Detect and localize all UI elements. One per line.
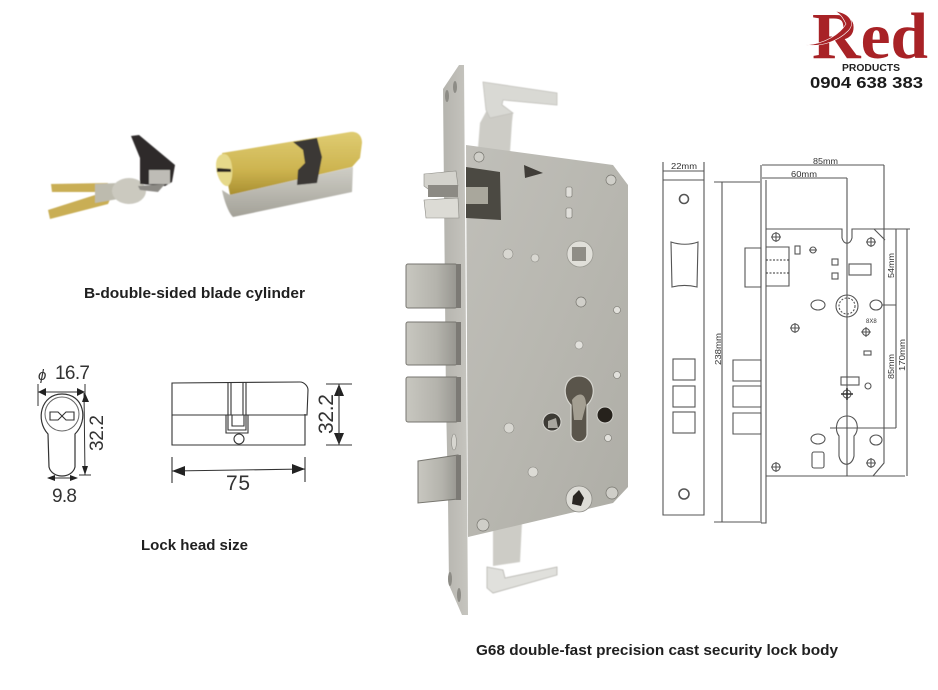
dimension: 54mm: 54mm [886, 253, 896, 278]
diagram: cylinder front view [38, 363, 108, 507]
photo: key set [48, 135, 175, 219]
dimension: 32.2 vertical: 32.2 [87, 415, 108, 451]
faceplate [443, 65, 468, 615]
dimension: 85mm top: 85mm [813, 156, 838, 166]
logo subtitle: PRODUCTS [842, 63, 900, 74]
bottom hook latch [487, 522, 557, 593]
dimension: 16.7: 16.7 [55, 363, 90, 384]
photo: brass cylinder [216, 132, 362, 217]
dimension: 9.8: 9.8 [52, 486, 77, 507]
logo: Red Products [806, 0, 928, 92]
caption: lock body: G68 double-fast precision cast security lock body [476, 642, 839, 659]
latch window and latch tongues [424, 167, 501, 220]
dimension: 32.2 side: 32.2 [315, 394, 338, 434]
diagram: cylinder side view [172, 382, 352, 495]
top hook latch [478, 82, 557, 152]
diagram: strike plate [663, 161, 704, 515]
body plate [466, 145, 628, 537]
dimension: 60mm: 60mm [791, 169, 817, 179]
dimension: diameter symbol: ϕ [38, 367, 46, 384]
logo phone: 0904 638 383 [810, 75, 923, 92]
caption: lock head size: Lock head size [141, 537, 248, 554]
dimension: 170mm: 170mm [897, 339, 907, 371]
dimension: 22mm: 22mm [671, 161, 697, 171]
diagram: lock body technical drawing [713, 156, 910, 523]
logo wordmark: Red [812, 0, 928, 73]
photo: lock body [406, 65, 628, 615]
dimension: 85mm vertical: 85mm [886, 354, 896, 379]
dimension: 75: 75 [226, 472, 250, 495]
dimension: 8X8: 8X8 [866, 319, 877, 325]
logo swoosh [806, 11, 852, 45]
bolts [406, 264, 461, 503]
dimension: 238mm: 238mm [713, 333, 723, 365]
holes, screws and cutouts [445, 81, 620, 602]
caption: blade cylinder: B-double-sided blade cylinder [84, 285, 305, 302]
